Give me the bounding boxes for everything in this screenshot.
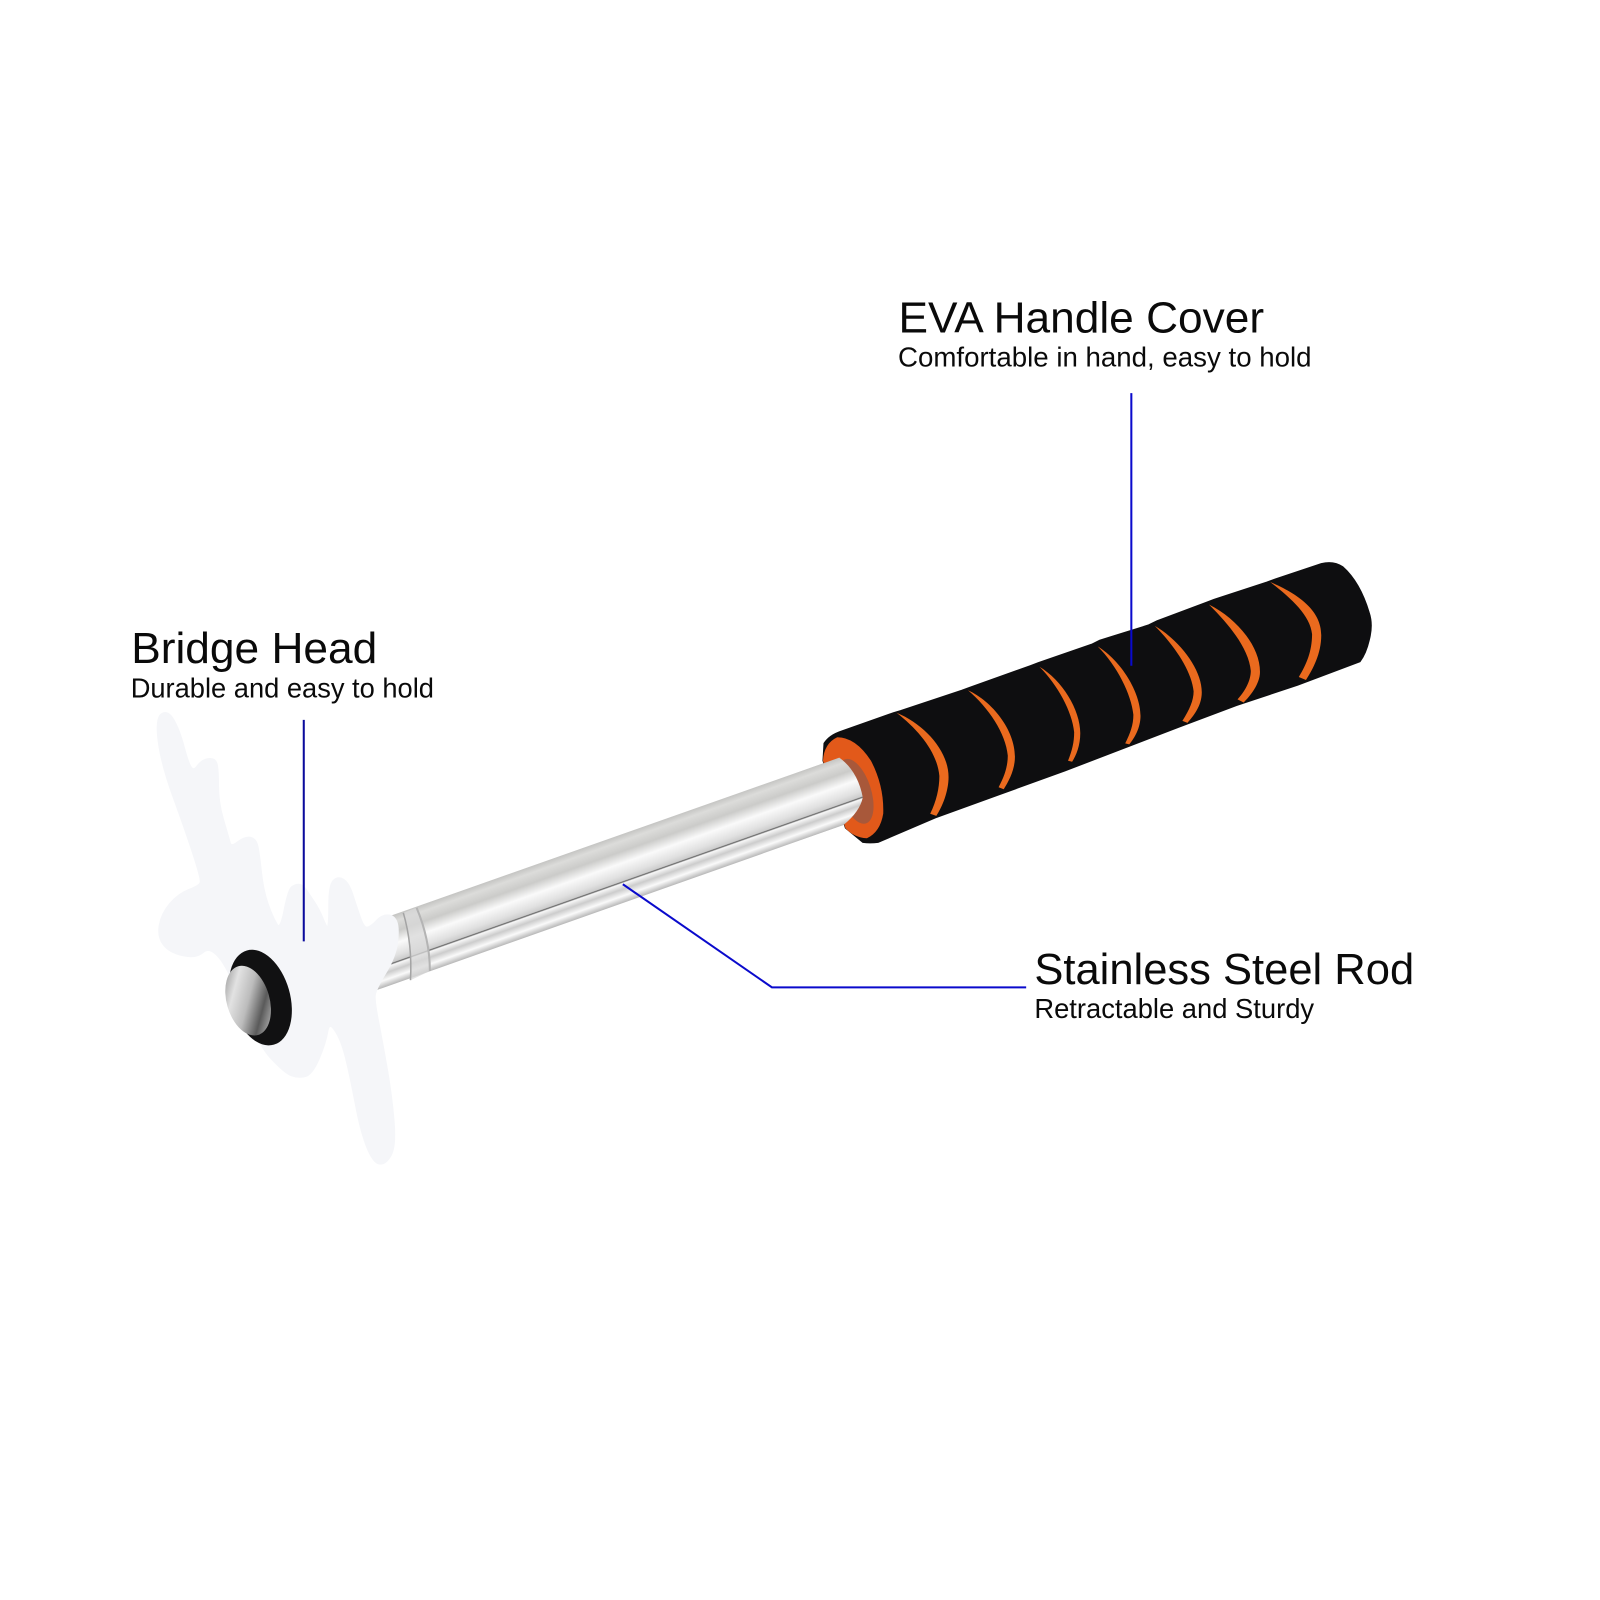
rod end inside handle [796, 758, 863, 841]
callout line: EVA handle cover [1130, 393, 1132, 666]
label: stainless steel rod [1034, 945, 1414, 1024]
label: bridge head: Durable and easy to hold [131, 672, 434, 703]
orange handle end face [823, 737, 883, 838]
rod collar [403, 908, 430, 980]
label: EVA handle cover: Comfortable in hand, easy to hold [898, 342, 1312, 373]
stainless steel rod [376, 758, 863, 990]
orange grooves [896, 582, 1321, 816]
black rubber ring [218, 942, 302, 1053]
inner ring of handle end [831, 755, 881, 828]
label: stainless steel rod: Stainless Steel Rod [1034, 945, 1414, 994]
label: EVA handle cover [898, 293, 1312, 373]
label: stainless steel rod: Retractable and Sturdy [1034, 993, 1314, 1024]
callout line: bridge head [303, 720, 305, 941]
label: EVA handle cover: EVA Handle Cover [899, 293, 1264, 342]
label: bridge head [131, 624, 434, 703]
steel ball [218, 960, 279, 1041]
white bridge head [158, 714, 397, 1163]
EVA foam handle [796, 563, 1371, 843]
label: bridge head: Bridge Head [131, 624, 377, 673]
callout line: stainless steel rod [623, 884, 1026, 987]
